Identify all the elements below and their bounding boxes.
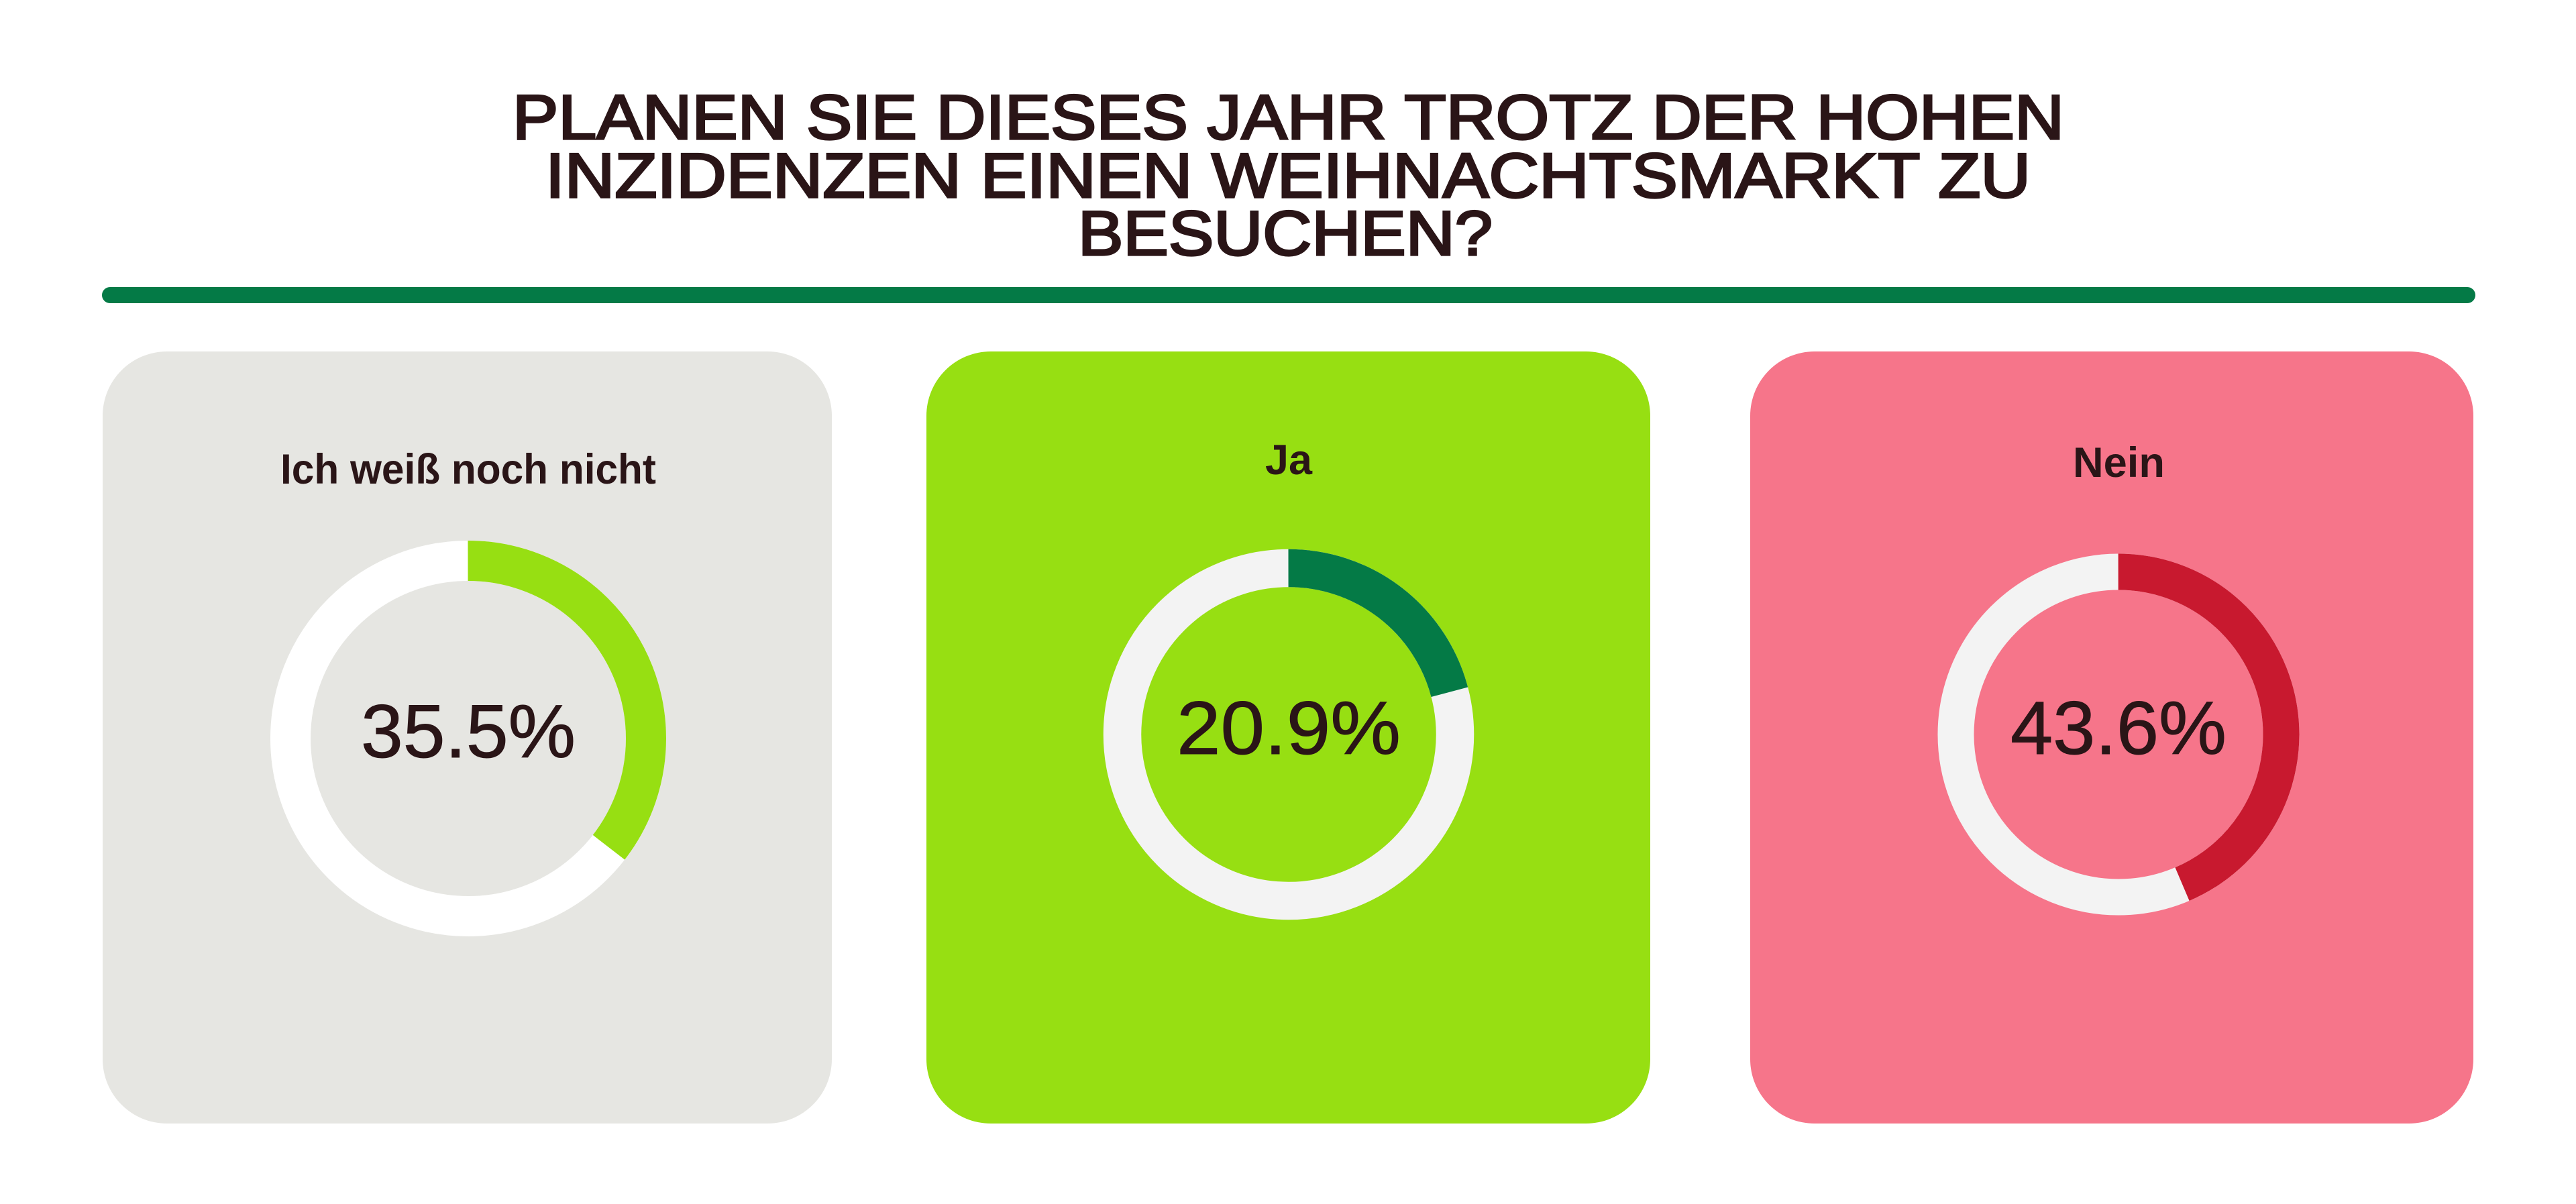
panel background grey xyxy=(103,351,832,1124)
label: Nein: Nein xyxy=(2073,439,2165,486)
title xyxy=(513,82,2064,268)
label: Ich weiß noch nicht: Ich weiß noch nicht xyxy=(280,446,656,493)
panel background lime xyxy=(926,351,1650,1124)
value 35.5%: 35.5% xyxy=(361,690,576,773)
donut chart 43.6% xyxy=(1956,571,2281,897)
value 43.6%: 43.6% xyxy=(2010,686,2226,770)
title: PLANEN SIE DIESES JAHR TROTZ DER HOHEN xyxy=(513,82,2064,152)
value 20.9%: 20.9% xyxy=(1177,686,1401,770)
green divider bar xyxy=(102,287,2475,303)
panel: Nein xyxy=(1750,351,2473,1124)
panel: Ja xyxy=(926,351,1650,1124)
title: BESUCHEN? xyxy=(1078,198,1493,268)
title: INZIDENZEN EINEN WEIHNACHTSMARKT ZU xyxy=(545,140,2031,211)
panel background pink xyxy=(1750,351,2473,1124)
donut chart 20.9% xyxy=(1122,568,1455,901)
label: Ja: Ja xyxy=(1265,437,1313,484)
donut chart 35.5% xyxy=(290,561,646,916)
panel: Ich weiß noch nicht xyxy=(103,351,832,1124)
